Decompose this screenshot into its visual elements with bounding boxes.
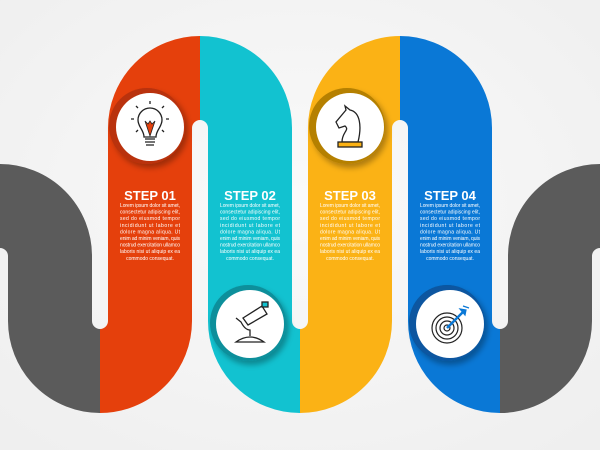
text: step 1: STEP 01 <box>124 188 176 203</box>
text: step 2: laboris nisi ut aliquip ex ea <box>220 249 280 255</box>
ribbon: blue step 4 <box>400 78 500 371</box>
text: step 3: nostrud exercitation ullamco <box>320 243 380 249</box>
ribbon: teal step 2 <box>200 78 300 371</box>
text: step 4: nostrud exercitation ullamco <box>420 243 480 249</box>
text: step 4 <box>420 188 481 262</box>
text: step 2: STEP 02 <box>224 188 276 203</box>
text: step 4: dolore magna aliqua. Ut <box>420 229 481 235</box>
text: step 2: enim ad minim veniam, quis <box>220 236 280 242</box>
ribbon: gray left <box>0 206 100 371</box>
text: step 1: dolore magna aliqua. Ut <box>120 229 181 235</box>
text: step 1: nostrud exercitation ullamco <box>120 243 180 249</box>
text: step 3: incididunt ut labore et <box>320 223 381 229</box>
ribbon: red step 1 <box>100 78 200 371</box>
text: step 3: sed do eiusmod tempor <box>320 216 380 222</box>
ribbon: yellow step 3 <box>300 78 400 371</box>
text: step 1: laboris nisi ut aliquip ex ea <box>120 249 180 255</box>
text: step 4: STEP 04 <box>424 188 477 203</box>
text: step 4: enim ad minim veniam, quis <box>420 236 480 242</box>
text: step 1 <box>120 188 181 262</box>
text: step 1: commodo consequat. <box>126 256 174 262</box>
text: step 2 <box>220 188 281 262</box>
ribbon: gray right <box>500 206 600 371</box>
text: step 3: laboris nisi ut aliquip ex ea <box>320 249 380 255</box>
icon circle: step 2 microscope <box>210 285 286 361</box>
icon: lightbulb <box>131 101 169 145</box>
text: step 1: Lorem ipsum dolor sit amet, <box>120 203 180 209</box>
text: step 1: sed do eiusmod tempor <box>120 216 180 222</box>
text: step 2: nostrud exercitation ullamco <box>220 243 280 249</box>
text: step 2: dolore magna aliqua. Ut <box>220 229 281 235</box>
text: step 4: incididunt ut labore et <box>420 223 481 229</box>
text: step 4: sed do eiusmod tempor <box>420 216 480 222</box>
text: step 2: consectetur adipiscing elit, <box>220 210 280 216</box>
text: step 2: incididunt ut labore et <box>220 223 281 229</box>
icon circle: step 3 chess knight <box>309 88 385 164</box>
text: step 4: laboris nisi ut aliquip ex ea <box>420 249 480 255</box>
icon: knight <box>336 106 362 147</box>
text: step 2: sed do eiusmod tempor <box>220 216 280 222</box>
text: step 4: consectetur adipiscing elit, <box>420 210 480 216</box>
text: step 3: enim ad minim veniam, quis <box>320 236 380 242</box>
text: step 1: incididunt ut labore et <box>120 223 181 229</box>
text: step 3: commodo consequat. <box>326 256 374 262</box>
text: step 3: dolore magna aliqua. Ut <box>320 229 381 235</box>
text: step 1: enim ad minim veniam, quis <box>120 236 180 242</box>
text: step 3: Lorem ipsum dolor sit amet, <box>320 203 380 209</box>
text: step 3: STEP 03 <box>324 188 376 203</box>
icon: target with dart <box>432 306 469 343</box>
icon: microscope <box>236 302 268 342</box>
icon circle: step 4 target <box>409 285 485 361</box>
text: step 3 <box>320 188 381 262</box>
text: step 1: consectetur adipiscing elit, <box>120 210 180 216</box>
text: step 4: Lorem ipsum dolor sit amet, <box>420 203 480 209</box>
text: step 2: commodo consequat. <box>226 256 274 262</box>
text: step 2: Lorem ipsum dolor sit amet, <box>220 203 280 209</box>
text: step 3: consectetur adipiscing elit, <box>320 210 380 216</box>
icon circle: step 1 lightbulb <box>109 88 185 164</box>
text: step 4: commodo consequat. <box>426 256 474 262</box>
